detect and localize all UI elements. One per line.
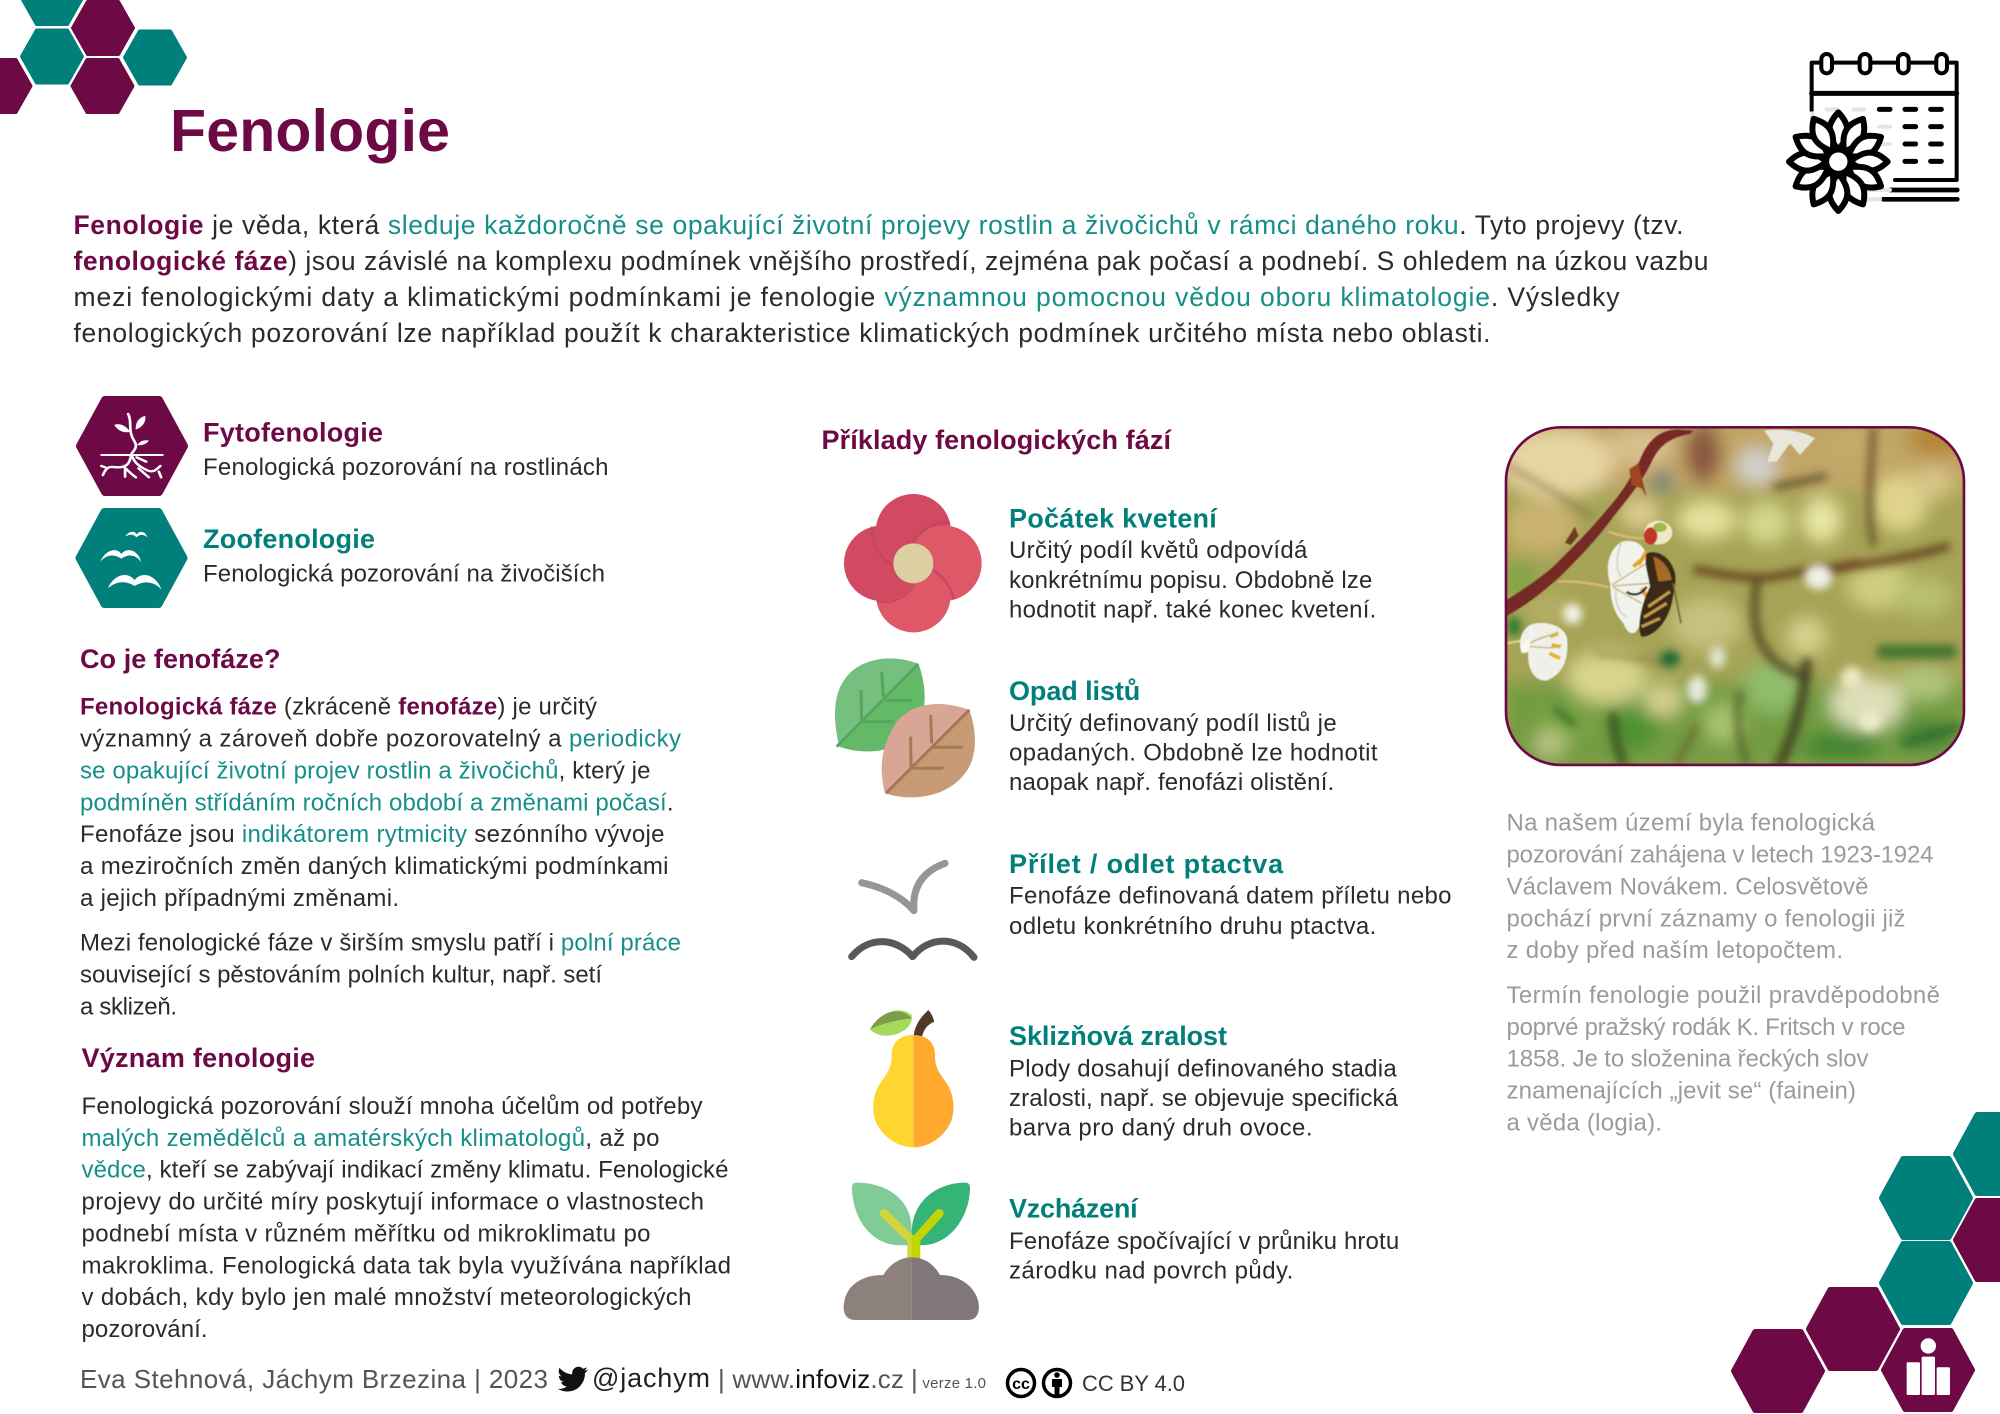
intro text block: Fenologie je věda, která sleduje každoročně se opakující životní projevy rostlin a živočichů v rámci daného roku. Tyto projevy (tzv. xyxy=(74,210,1684,240)
text block: Význam fenologie xyxy=(82,1093,731,1343)
side note text: z doby před naším letopočtem. xyxy=(1506,937,1843,964)
description: Fytofenologie: Fenologická pozorování na rostlinách xyxy=(203,454,608,481)
text block: Význam fenologie: v dobách, kdy bylo jen malé množství meteorologických xyxy=(82,1284,692,1311)
side note text: Václavem Novákem. Celosvětově xyxy=(1506,874,1868,900)
text: Přílet / odlet ptactva xyxy=(1009,849,1452,940)
text: Počátek kvetení: hodnotit např. také konec kvetení. xyxy=(1009,596,1376,624)
icon: attribution xyxy=(1044,1370,1070,1396)
text block: Co je fenofáze: a jejich případnými změnami. xyxy=(80,885,399,912)
side note text xyxy=(1506,810,1940,1136)
icon: plant with roots xyxy=(80,400,184,492)
intro text block: fenologických pozorování lze například použít k charakteristice klimatických podmínek určitého místa nebo oblasti. xyxy=(74,318,1490,348)
icon: calendar with flower xyxy=(1789,54,1957,211)
side note text: znamenajících „jevit se“ (fainein) xyxy=(1506,1078,1856,1104)
intro text block: mezi fenologickými daty a klimatickými podmínkami je fenologie významnou pomocnou vědou oboru klimatologie. Výsledky xyxy=(74,282,1620,312)
text: Počátek kvetení: Určitý podíl květů odpovídá xyxy=(1009,537,1308,564)
decoration: top-left hexagons xyxy=(0,0,186,112)
icon: infoviz logo hexagon xyxy=(1884,1330,1972,1410)
text block: Význam fenologie: podnebí místa v různém měřítku od mikroklimatu po xyxy=(82,1220,650,1248)
intro text block: fenologické fáze) jsou závislé na komplexu podmínek vnějšího prostředí, zejména pak počasí a podnebí. S ohledem na úzkou vazbu xyxy=(74,246,1708,276)
heading: Význam fenologie: Význam fenologie xyxy=(82,1043,315,1073)
icon: creative commons xyxy=(1008,1370,1034,1396)
heading: Příklady fenologických fází: Příklady fenologických fází xyxy=(822,425,1172,455)
side note text: 1858. Je to složenina řeckých slov xyxy=(1506,1046,1868,1072)
text: Vzcházení: Vzcházení xyxy=(1009,1194,1139,1224)
text: Přílet / odlet ptactva: Přílet / odlet ptactva xyxy=(1009,849,1284,879)
text block: Co je fenofáze: a sklizeň. xyxy=(80,994,177,1020)
icon: twitter bird xyxy=(558,1367,588,1392)
text: Počátek kvetení: konkrétnímu popisu. Obdobně lze xyxy=(1009,567,1372,594)
footer xyxy=(80,1363,1185,1396)
text block: Co je fenofáze: související s pěstováním polních kultur, např. setí xyxy=(80,962,602,988)
footer: licence: CC BY 4.0 xyxy=(1082,1371,1185,1396)
text block: Co je fenofáze: Mezi fenologické fáze v širším smyslu patří i polní práce xyxy=(80,930,681,956)
decoration: bottom-right hexagons xyxy=(1734,1114,2000,1410)
text: Počátek kvetení xyxy=(1009,504,1376,624)
text block: Co je fenofáze: Fenologická fáze (zkráceně fenofáze) je určitý xyxy=(80,694,597,720)
text block: Co je fenofáze: významný a zároveň dobře pozorovatelný a periodicky xyxy=(80,726,681,752)
text: Přílet / odlet ptactva: odletu konkrétního druhu ptactva. xyxy=(1009,913,1376,940)
text: Sklizňová zralost: Sklizňová zralost xyxy=(1009,1021,1227,1051)
text block: Co je fenofáze: Fenofáze jsou indikátorem rytmicity sezónního vývoje xyxy=(80,821,664,848)
heading: Fytofenologie: Fytofenologie xyxy=(203,418,383,448)
side note text: pochází první záznamy o fenologii již xyxy=(1506,906,1906,932)
description: Zoofenologie: Fenologická pozorování na živočiších xyxy=(203,560,605,588)
footer: twitter handle: @jachym xyxy=(592,1363,710,1393)
side note text: Termín fenologie použil pravděpodobně xyxy=(1506,982,1940,1009)
icon: creative commons: cc xyxy=(1012,1376,1030,1393)
text block: Význam fenologie: vědce, kteří se zabývají indikací změny klimatu. Fenologické xyxy=(82,1156,728,1184)
text block: Význam fenologie: pozorování. xyxy=(82,1316,208,1343)
panel: Fytofenologie xyxy=(80,400,608,492)
text: Opad listů: naopak např. fenofázi olistění. xyxy=(1009,769,1334,796)
text: Počátek kvetení: Počátek kvetení xyxy=(1009,504,1218,534)
text: Opad listů xyxy=(1009,676,1378,796)
text block: Co je fenofáze xyxy=(80,694,681,1020)
icon: pear xyxy=(870,1010,953,1147)
text: Přílet / odlet ptactva: Fenofáze definovaná datem příletu nebo xyxy=(1009,882,1452,910)
footer: version: | verze 1.0 xyxy=(911,1364,986,1394)
photo: bee on blossom xyxy=(1490,410,1990,783)
text: Sklizňová zralost: barva pro daný druh ovoce. xyxy=(1009,1114,1312,1142)
text: Opad listů: Opad listů xyxy=(1009,676,1140,706)
icon: birds xyxy=(80,512,184,604)
footer: website: | www.infoviz.cz xyxy=(718,1364,904,1394)
text: Sklizňová zralost xyxy=(1009,1021,1399,1142)
text: Sklizňová zralost: zralosti, např. se objevuje specifická xyxy=(1009,1085,1399,1112)
footer: authors: Eva Stehnová, Jáchym Brzezina | 2023 xyxy=(80,1364,548,1394)
text block: Co je fenofáze: podmíněn střídáním ročních období a změnami počasí. xyxy=(80,790,674,816)
side note text: a věda (logia). xyxy=(1506,1110,1662,1136)
text block: Význam fenologie: projevy do určité míry poskytují informace o vlastnostech xyxy=(82,1188,704,1216)
text: Opad listů: Určitý definovaný podíl listů je xyxy=(1009,710,1337,737)
icon: leaves xyxy=(835,659,975,797)
icon: flower xyxy=(844,494,982,632)
heading: Co je fenofáze?: Co je fenofáze? xyxy=(80,644,280,674)
text block: Význam fenologie: malých zemědělců a amatérských klimatologů, až po xyxy=(82,1125,660,1152)
icon: sprout xyxy=(844,1183,979,1320)
intro text block xyxy=(74,210,1708,348)
text block: Co je fenofáze: se opakující životní projev rostlin a živočichů, který je xyxy=(80,758,650,784)
text block: Co je fenofáze: a meziročních změn daných klimatickými podmínkami xyxy=(80,853,668,880)
text: Opad listů: opadaných. Obdobně lze hodnotit xyxy=(1009,740,1378,766)
side note text: pozorování zahájena v letech 1923-1924 xyxy=(1506,842,1934,868)
text: Vzcházení xyxy=(1009,1194,1399,1284)
text: Sklizňová zralost: Plody dosahují definovaného stadia xyxy=(1009,1056,1397,1082)
heading: Zoofenologie: Zoofenologie xyxy=(203,524,375,554)
panel: Zoofenologie xyxy=(80,512,605,604)
text: Vzcházení: zárodku nad povrch půdy. xyxy=(1009,1258,1293,1284)
side note text: poprvé pražský rodák K. Fritsch v roce xyxy=(1506,1014,1906,1041)
side note text: Na našem území byla fenologická xyxy=(1506,810,1876,836)
title: Fenologie xyxy=(170,98,450,164)
text block: Význam fenologie: makroklima. Fenologická data tak byla využívána například xyxy=(82,1252,731,1280)
text: Vzcházení: Fenofáze spočívající v průniku hrotu xyxy=(1009,1228,1399,1255)
text block: Význam fenologie: Fenologická pozorování slouží mnoha účelům od potřeby xyxy=(82,1093,702,1120)
icon: birds migration xyxy=(852,863,974,957)
